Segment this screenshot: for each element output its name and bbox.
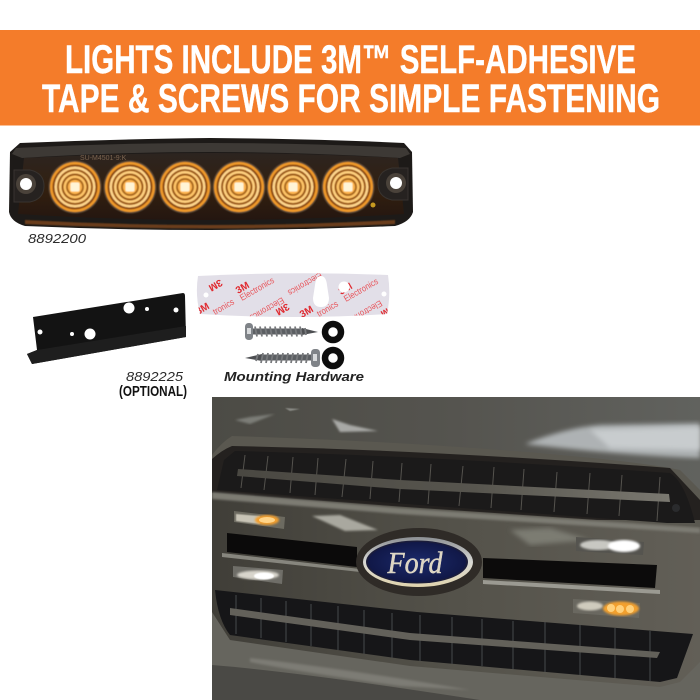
- 3M adhesive tape: Electronics: [346, 298, 384, 326]
- truck grille photo: [212, 397, 700, 700]
- ford oval badge: [356, 528, 482, 596]
- 3M adhesive tape: Electronics: [342, 276, 380, 304]
- 3M adhesive tape: tronics: [315, 298, 340, 319]
- 3M adhesive tape: tronics: [211, 296, 236, 317]
- mounting ear: left: [14, 170, 44, 202]
- 3M adhesive tape: Electronics: [248, 295, 286, 323]
- mounting hardware label: Mounting Hardware: [224, 369, 364, 384]
- 3M adhesive tape: Electronics: [286, 270, 324, 298]
- optional label: (OPTIONAL): [119, 383, 187, 400]
- upper horizontal bar: [237, 469, 670, 502]
- washer 2: [325, 350, 341, 366]
- 3M adhesive tape: 3M: [194, 301, 212, 318]
- 3M adhesive tape: 3M: [234, 280, 252, 297]
- bumper: [212, 612, 700, 700]
- washer 1: [325, 324, 341, 340]
- 3M adhesive tape: [197, 273, 390, 317]
- strobe light: top-right white: [576, 537, 644, 555]
- lower grille opening: [215, 590, 693, 682]
- upper grille opening: [217, 451, 695, 523]
- ford oval badge: Ford: [387, 545, 443, 580]
- 3M adhesive tape: 3M: [206, 276, 224, 293]
- mounting ear: right: [378, 168, 408, 200]
- 3M adhesive tape: 3M: [273, 300, 291, 317]
- 3M adhesive tape: 3M: [298, 304, 316, 321]
- 3M adhesive tape: 3M: [337, 281, 355, 298]
- banner: [0, 30, 700, 126]
- part number 8892200: 8892200: [28, 231, 87, 246]
- 3M adhesive tape: Electronics: [238, 275, 276, 303]
- screw 2: [245, 349, 320, 367]
- left slot: [227, 533, 357, 567]
- hood: [212, 397, 700, 700]
- LED light product photo: [9, 138, 413, 230]
- body panel: [212, 493, 700, 700]
- 3M adhesive tape: 3M: [378, 302, 396, 319]
- hood reflections: [235, 408, 700, 458]
- body-color crossbar reflections: [212, 492, 700, 545]
- six amber LEDs: [48, 160, 374, 214]
- screw 1: [245, 323, 318, 340]
- LED light product photo: SU-M4501-9:K: [80, 155, 127, 162]
- right slot: [483, 558, 657, 588]
- lower horizontal bar: [230, 608, 660, 658]
- strobe light: top-left amber: [234, 511, 285, 529]
- strobe light: bottom-left white: [233, 566, 283, 584]
- strobe light: bottom-right amber: [573, 599, 640, 618]
- hood leading edge: [212, 436, 700, 540]
- part number 8892225: 8892225: [126, 369, 184, 384]
- mounting bracket: [27, 293, 186, 364]
